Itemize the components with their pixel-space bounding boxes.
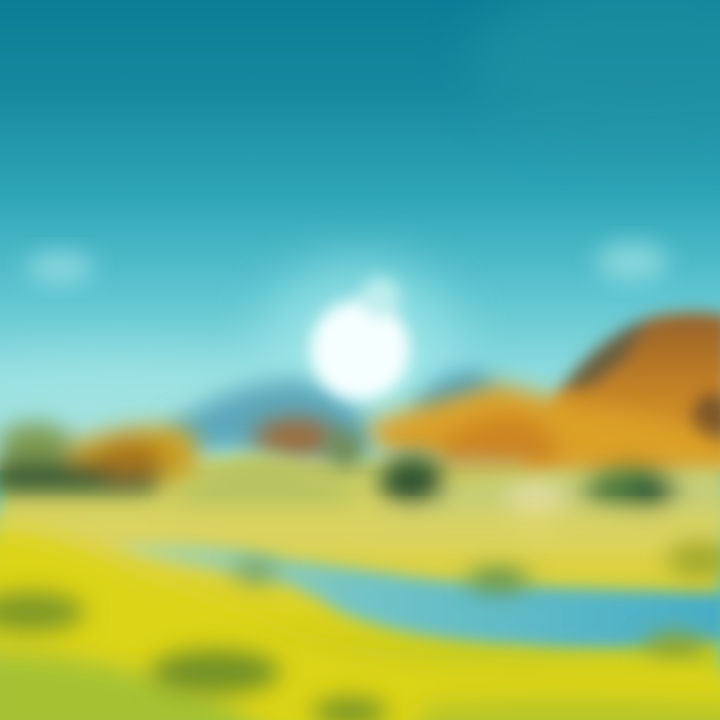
distant blue mountains [170,371,500,450]
sun [310,278,410,400]
river bank tufts [233,542,720,663]
sky [0,0,720,470]
river [110,543,720,649]
mid green hills and trees [170,432,720,529]
clouds [26,242,668,285]
meadow band [0,510,720,544]
left hills [0,423,199,492]
orange hills centre [253,384,720,470]
foreground shrubs [0,592,388,720]
right brown mountain [520,312,720,470]
foreground yellow meadow [0,530,720,720]
ground [0,460,720,720]
